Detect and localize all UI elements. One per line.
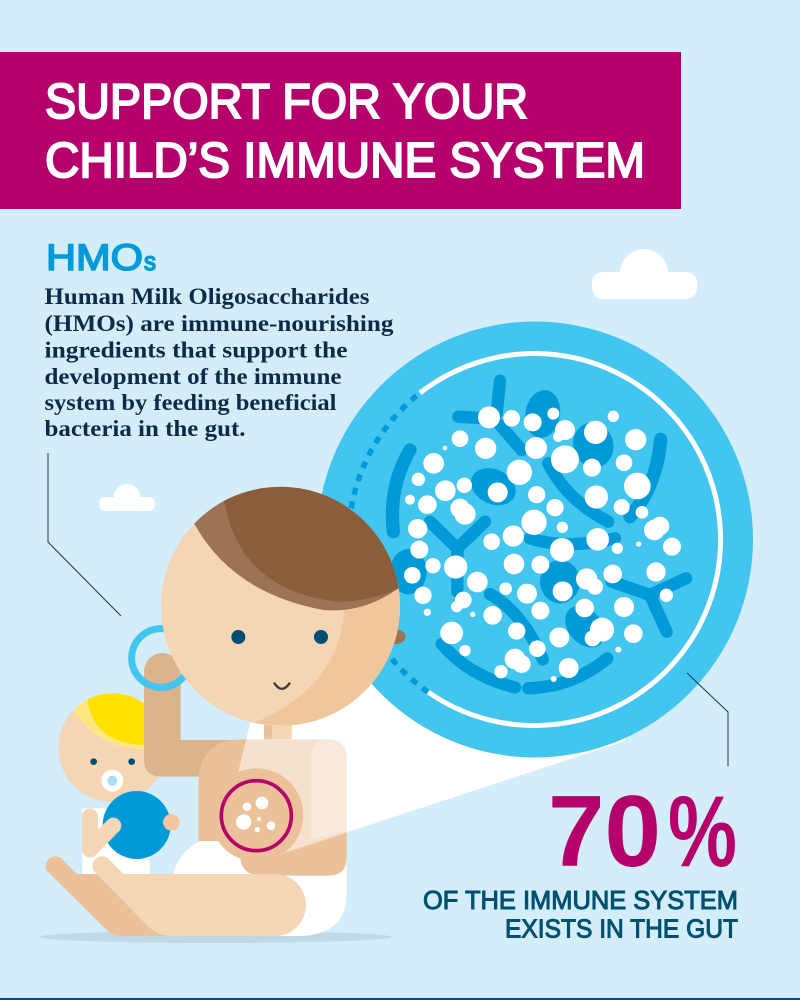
statistic: 70%: [548, 776, 737, 888]
ground shadow: [40, 931, 392, 943]
ring: dashed arc: [349, 393, 428, 692]
statistic: 70%: 70: [548, 776, 661, 888]
heading: HMOs: s: [144, 246, 156, 276]
beam over torso: [238, 739, 347, 854]
front leg: [92, 856, 306, 936]
text block: HMO description: system by feeding beneficial: [44, 390, 336, 415]
magnification beam: [237, 500, 640, 855]
hair bun: [384, 629, 406, 644]
bottom border: [0, 998, 800, 1000]
parent head: [157, 480, 413, 733]
magenta ring with milk dots: [221, 781, 291, 851]
title banner: SUPPORT FOR YOUR: [45, 74, 528, 129]
neck: [264, 720, 292, 741]
figure: parent front details: [46, 739, 347, 936]
pacifier: [101, 770, 123, 792]
caption: immune system in the gut: [423, 885, 738, 944]
leader line: text to head: [48, 453, 121, 616]
eyes: [231, 630, 328, 644]
parent raised arm: [144, 653, 243, 777]
diaper: [170, 841, 347, 936]
icon: cloud top right: [592, 249, 697, 299]
lower arm: [240, 839, 347, 876]
baby eyes: [90, 758, 135, 765]
baby body: [82, 808, 150, 874]
text block: HMO description: bacteria in the gut.: [44, 416, 246, 441]
text block: HMO description: Human Milk Oligosaccharides: [44, 284, 370, 309]
text block: HMO description: ingredients that support the: [44, 338, 348, 362]
torso highlight panel: [311, 739, 347, 839]
text block: HMO description: [44, 284, 394, 441]
text block: HMO description: development of the immune: [44, 364, 342, 389]
caption: immune system in the gut: EXISTS IN THE GUT: [505, 914, 738, 944]
torso: [198, 739, 347, 841]
heading: HMOs: HMO: [46, 237, 143, 278]
statistic: 70%: %: [668, 776, 737, 888]
ring: white arc: [420, 354, 721, 726]
baby head: [58, 693, 158, 802]
baby arm: [90, 817, 113, 849]
baby hand right: [163, 814, 180, 831]
gut bacteria shapes: [390, 381, 686, 688]
leader line: circle to statistic: [687, 673, 728, 766]
chest circle: [210, 768, 303, 862]
icon: cloud left: [99, 484, 155, 511]
back leg: [46, 856, 170, 936]
figure: baby and parent: [57, 629, 347, 936]
smile: [274, 683, 290, 689]
title banner: [0, 52, 681, 209]
ball: [103, 791, 171, 859]
blue ring on arm: [132, 629, 190, 687]
text block: HMO description: (HMOs) are immune-nourishing: [44, 311, 394, 336]
caption: immune system in the gut: OF THE IMMUNE SYSTEM: [423, 885, 738, 915]
panel: gut magnified circle: [317, 322, 753, 758]
title banner: CHILD’S IMMUNE SYSTEM: [45, 133, 645, 188]
